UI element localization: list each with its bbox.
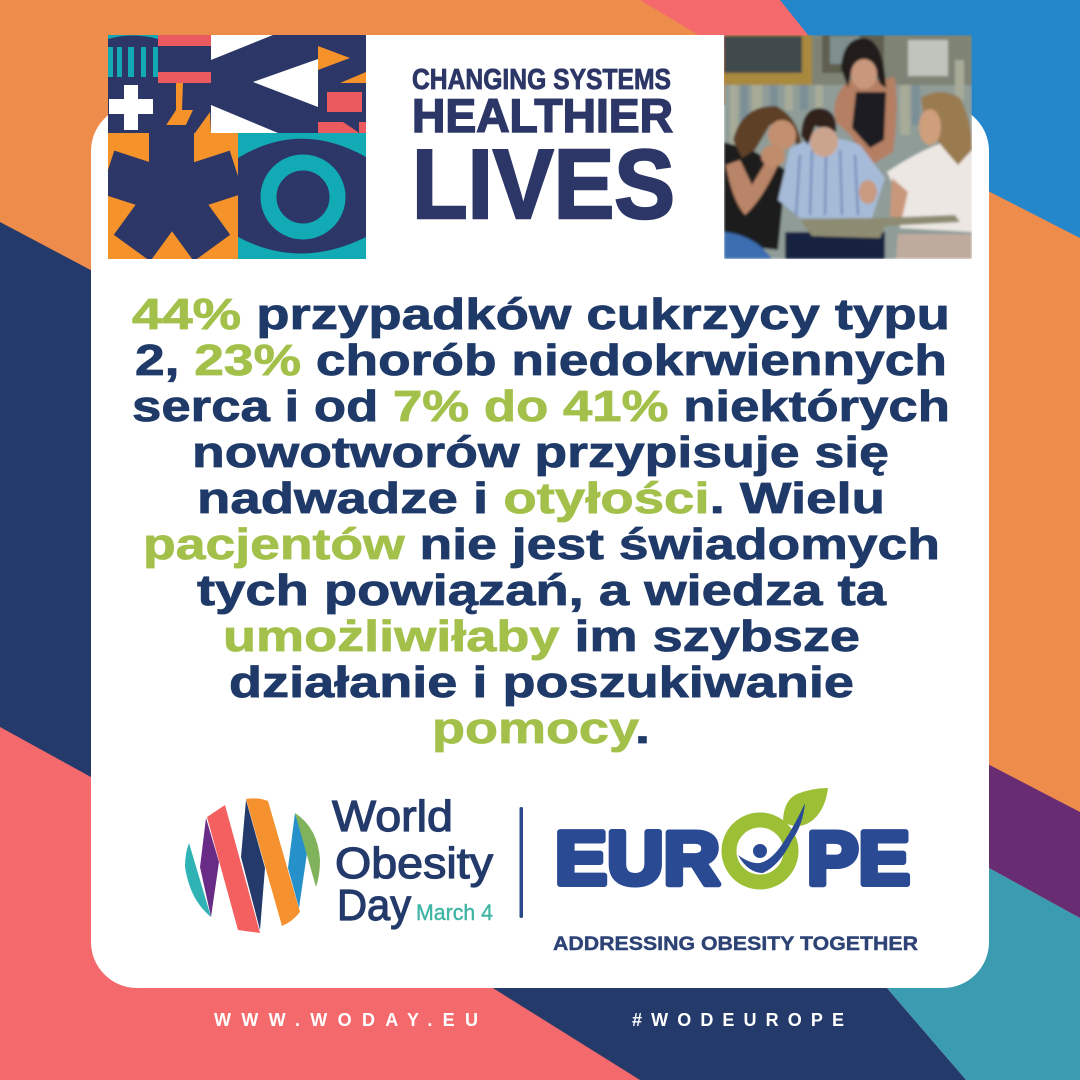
woman left: black shirt	[724, 142, 786, 250]
main statement text: 2, 23% chorób niedokrwiennych	[135, 336, 947, 385]
wall sconce	[908, 40, 948, 76]
figure with swoosh	[738, 803, 805, 873]
website footer: WWW.WODAY.EU	[214, 1010, 478, 1030]
World Obesity Day logo	[185, 792, 493, 933]
teal columns	[108, 47, 158, 77]
white content card	[91, 105, 989, 988]
Europe letters: EUR	[555, 816, 720, 900]
logo wordmark: Obesity	[335, 839, 493, 888]
Europe tagline: ADDRESSING OBESITY TOGETHER	[553, 933, 918, 955]
photo album	[800, 215, 960, 238]
campaign title: CHANGING SYSTEMS	[412, 64, 671, 96]
campaign title: HEALTHIER	[412, 89, 673, 142]
header white band	[366, 35, 724, 259]
main statement text: umożliwiłaby im szybsze	[223, 612, 860, 661]
main statement text: nadwadze i otyłości . Wielu	[197, 474, 885, 523]
wall	[724, 83, 972, 259]
main statement text: działanie i poszukiwanie	[229, 658, 854, 707]
main statement text: tych powiązań, a wiedza ta	[197, 566, 887, 615]
white triangles	[211, 35, 318, 133]
asterisk tile	[108, 133, 238, 259]
logo divider	[520, 807, 523, 918]
leaf	[783, 788, 828, 826]
white plus	[109, 85, 153, 130]
orange arrows	[318, 46, 366, 83]
ribbon emblem	[185, 798, 320, 933]
green ring O	[729, 820, 791, 882]
orange figure	[161, 83, 211, 133]
woman centre: striped shirt	[778, 138, 885, 218]
photo: four women looking at an album	[724, 35, 972, 259]
logo date: March 4	[416, 900, 493, 925]
main statement text: nowotworów przypisuje się	[192, 428, 889, 477]
main statement text: 44% przypadków cukrzycy typu	[132, 290, 950, 339]
woman right: white shirt	[887, 140, 972, 232]
campaign title	[412, 64, 675, 239]
icon collage	[100, 35, 366, 261]
coral bars	[158, 35, 211, 83]
woman standing	[834, 76, 897, 165]
main statement text: pomocy .	[432, 704, 650, 753]
speech bubbles	[318, 92, 366, 133]
campaign title: LIVES	[412, 129, 675, 239]
Europe letters: PE	[807, 816, 910, 900]
Europe logo	[553, 788, 918, 955]
main statement text: pacjentów nie jest świadomych	[143, 520, 940, 569]
logo wordmark	[332, 792, 493, 930]
logo wordmark: Day	[337, 881, 411, 930]
patterned trousers	[896, 234, 972, 259]
eye tile	[238, 133, 366, 259]
logo wordmark: World	[332, 792, 453, 841]
main statement text	[132, 290, 950, 753]
framed pictures	[724, 35, 812, 85]
hashtag footer: #WODEUROPE	[632, 1010, 844, 1030]
main statement text: serca i od 7% do 41% niektórych	[132, 382, 950, 431]
Europe letters	[555, 816, 910, 900]
